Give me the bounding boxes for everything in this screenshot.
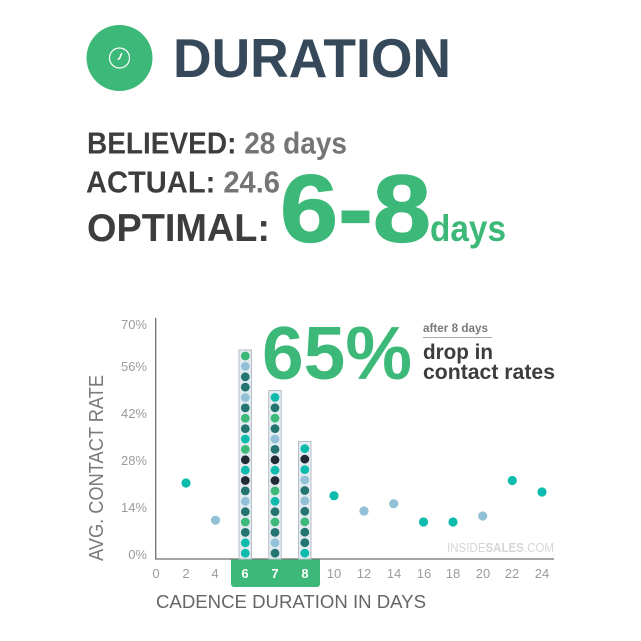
highlight band for 6 to 8 days: [231, 560, 320, 587]
scatter points: [181, 476, 547, 527]
x axis labels: 0: [152, 566, 160, 581]
optimal unit: days: [430, 208, 506, 249]
optimal value: 6-8: [280, 156, 431, 262]
x axis labels: 20: [476, 566, 490, 581]
column: 8 days: [298, 442, 311, 559]
callout: after 8 days: after 8 days: [423, 321, 488, 335]
callout: contact rates: contact rates: [423, 361, 555, 384]
callout: drop in: drop in: [423, 341, 493, 364]
icon: clock: [86, 25, 152, 91]
x axis labels: 16: [417, 566, 431, 581]
y axis labels: 42%: [121, 406, 147, 421]
highlighted x labels: 6: [241, 566, 249, 581]
x axis labels: 4: [211, 566, 219, 581]
y axis labels: 28%: [121, 453, 147, 468]
believed duration: BELIEVED: 28 days: [87, 126, 347, 160]
x axis title: CADENCE DURATION IN DAYS: [156, 592, 426, 612]
x axis labels: [152, 566, 549, 581]
callout rule: [423, 336, 492, 338]
y axis labels: 0%: [128, 547, 147, 562]
x axis labels: 14: [387, 566, 401, 581]
optimal label: OPTIMAL:: [87, 207, 270, 250]
y axis title: AVG. CONTACT RATE: [86, 375, 108, 561]
brand watermark: INSIDESALES.COM: [447, 541, 554, 555]
y axis labels: 56%: [121, 359, 147, 374]
title: DURATION: [173, 27, 451, 89]
x axis labels: 22: [505, 566, 519, 581]
chart axes: [156, 318, 554, 559]
x axis labels: 24: [535, 566, 549, 581]
x axis labels: 10: [327, 566, 341, 581]
column: 7 days: [269, 390, 281, 559]
y axis labels: 70%: [121, 317, 147, 332]
highlighted x labels: 7: [271, 566, 279, 581]
highlighted x labels: [241, 566, 309, 581]
y axis labels: [121, 317, 147, 562]
y axis labels: 14%: [121, 500, 147, 515]
actual duration: ACTUAL: 24.6: [86, 166, 280, 200]
x axis labels: 18: [446, 566, 460, 581]
x axis labels: 2: [182, 566, 190, 581]
highlighted x labels: 8: [301, 566, 309, 581]
x axis labels: 12: [357, 566, 371, 581]
big percentage: 65%: [262, 311, 412, 395]
column: 6 days: [239, 350, 252, 559]
